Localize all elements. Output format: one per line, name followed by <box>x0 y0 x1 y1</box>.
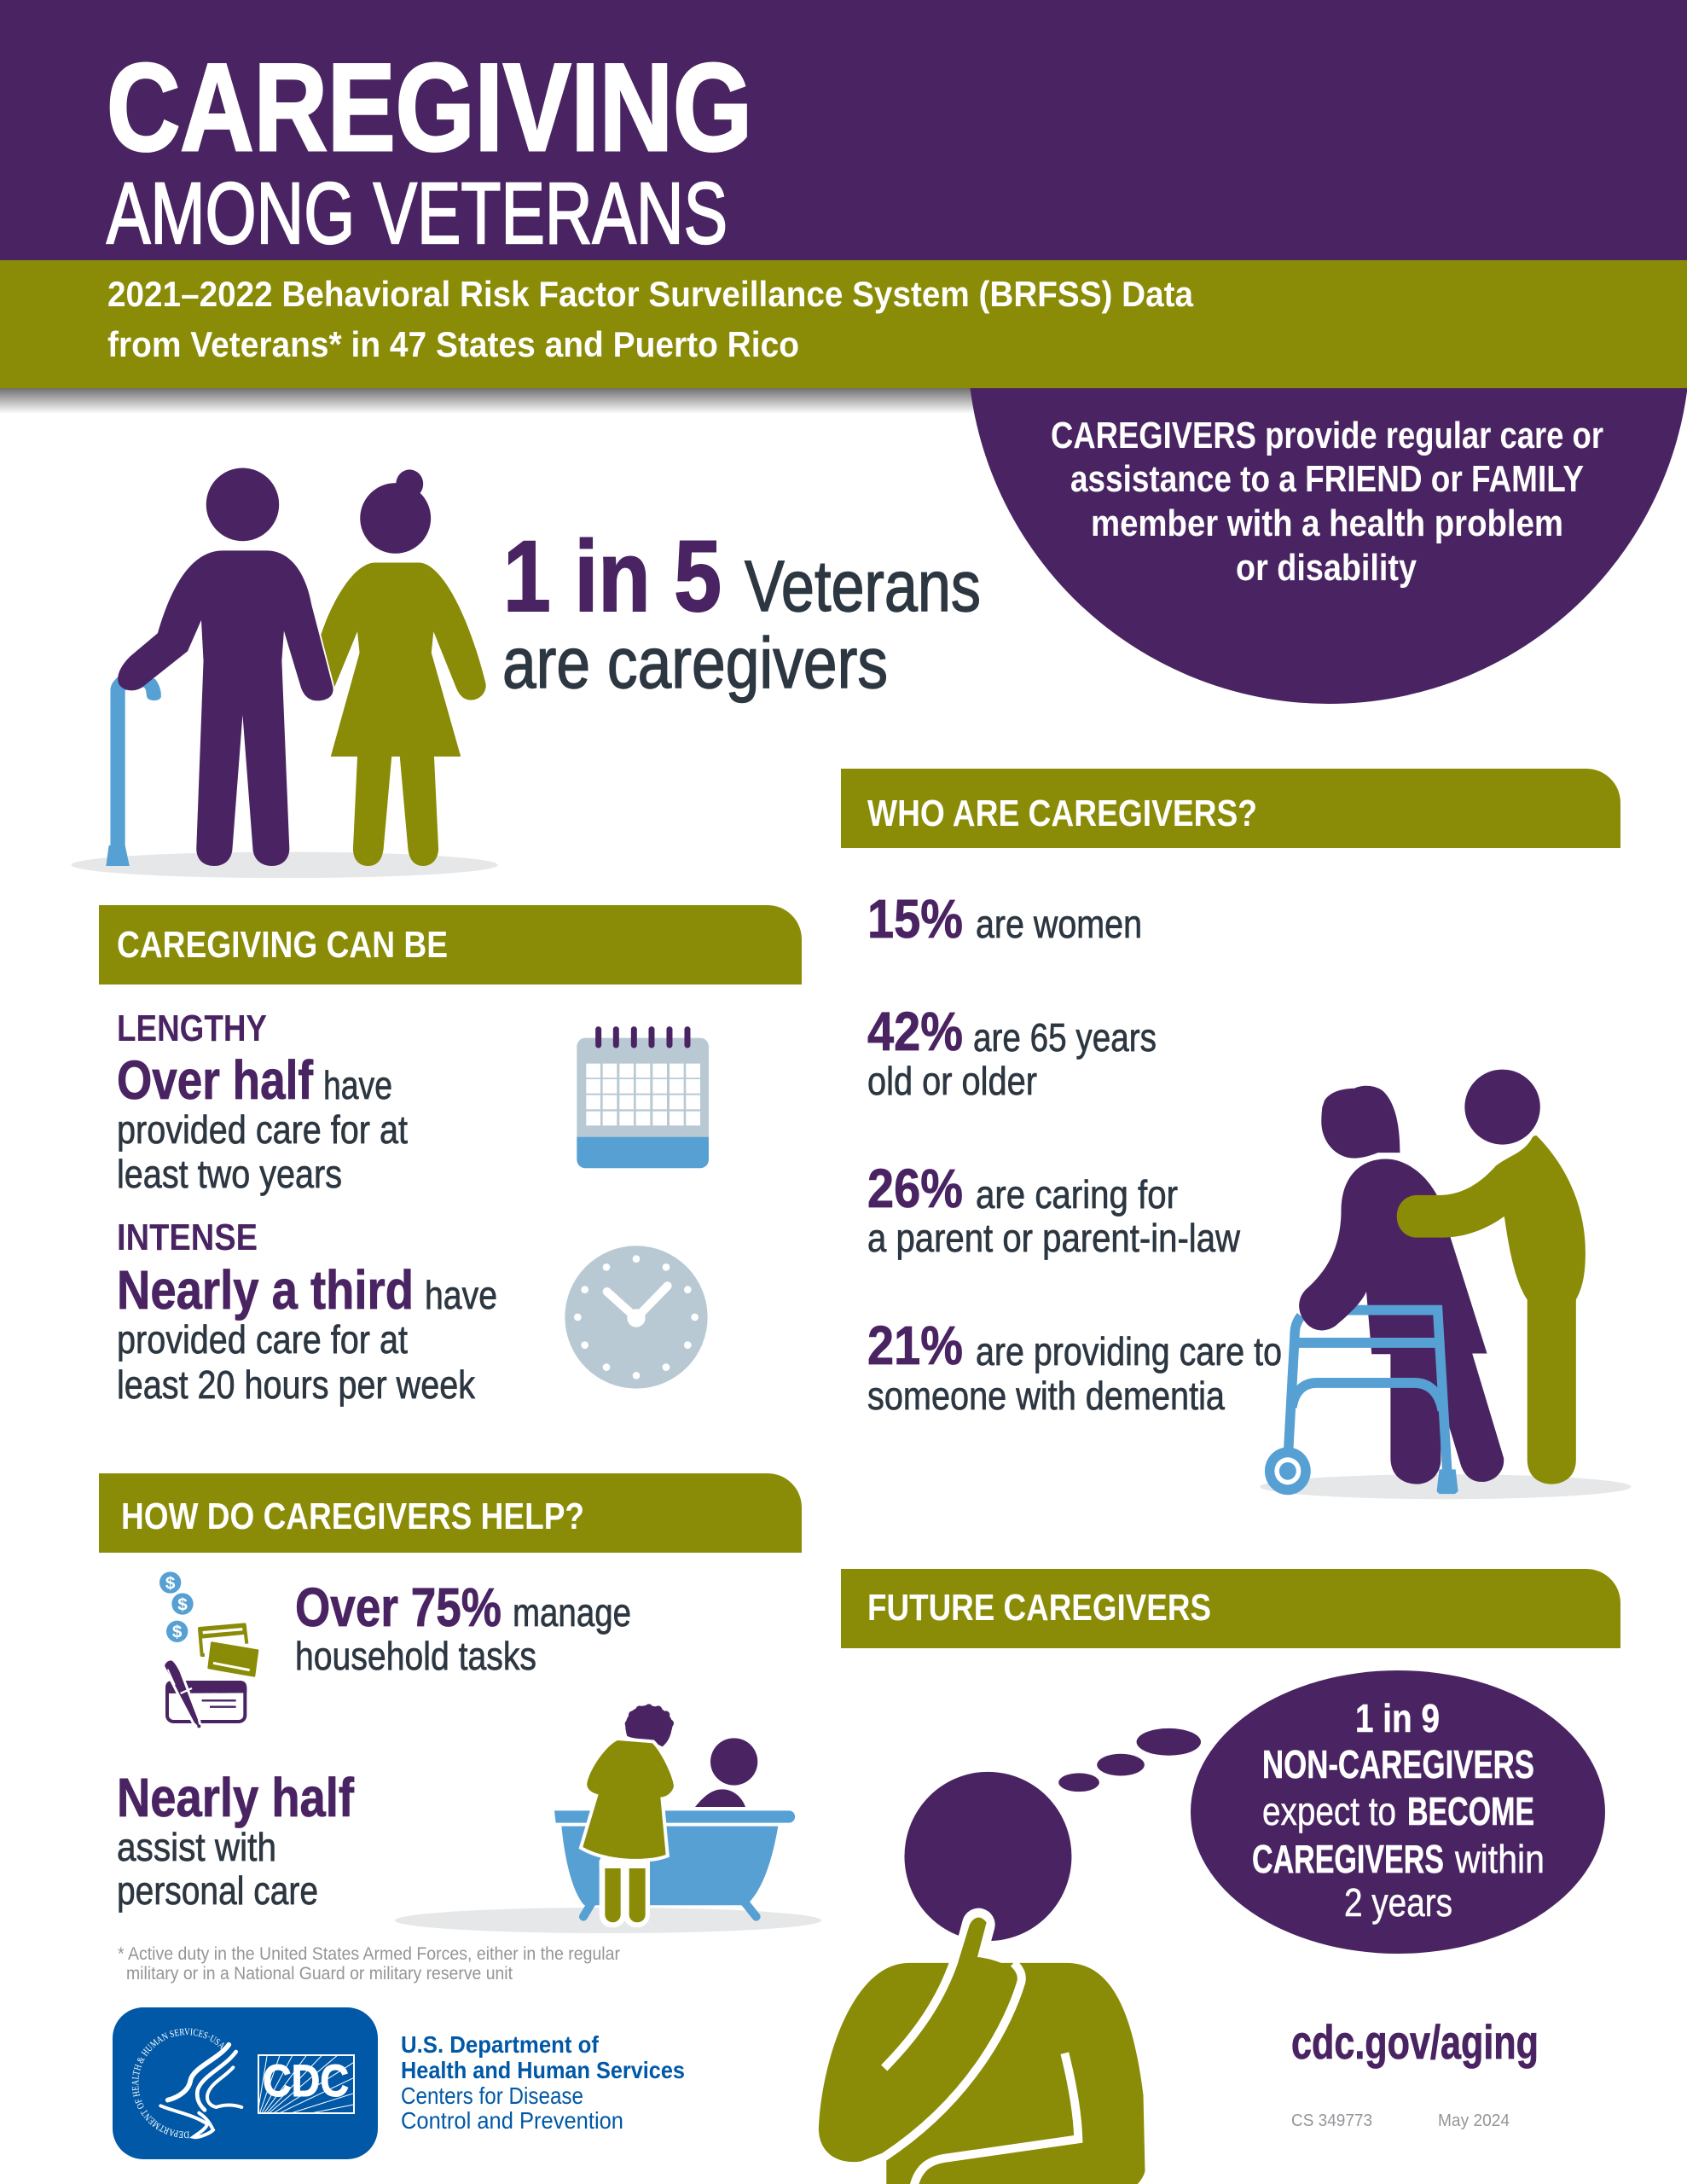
stat: 15 percent women: 15% <box>867 888 963 950</box>
stat: 42 percent 65 or older <box>867 1001 1157 1103</box>
headline stat: 1 in 5 <box>502 520 981 703</box>
text block: lengthy: Over half <box>117 1049 314 1111</box>
agency name: Centers for Disease <box>401 2082 583 2109</box>
callout: thought bubble: 2 years <box>1344 1880 1452 1925</box>
text block: household tasks: manage <box>513 1590 631 1635</box>
stat: 42 percent 65 or older: 42% <box>867 1001 963 1062</box>
text block: personal care: Nearly half <box>117 1767 355 1828</box>
panel: who are caregivers heading: WHO ARE CAREGIVERS? <box>867 793 1257 834</box>
stat: 26 percent caring for parent: 26% <box>867 1158 963 1219</box>
callout: caregiver definition: assistance to a FRIEND or FAMILY <box>1070 458 1584 500</box>
text block: personal care <box>117 1767 355 1913</box>
title: AMONG VETERANS <box>107 165 728 262</box>
text block: lengthy: have <box>323 1063 392 1107</box>
headline stat: 1 in 5: are caregivers <box>502 623 888 703</box>
callout: thought bubble <box>1191 1670 1605 1954</box>
panel: future caregivers heading <box>841 1569 1620 1648</box>
agency name: Control and Prevention <box>401 2107 623 2134</box>
stat: 21 percent dementia: are providing care to <box>976 1329 1282 1374</box>
text block: intense <box>117 1217 497 1407</box>
panel: caregiving can be heading <box>99 905 802 985</box>
icon: caregiver helping person with walker <box>1260 1070 1631 1499</box>
text block: personal care: assist with <box>117 1825 276 1869</box>
text block: intense: have <box>425 1273 497 1317</box>
text block: household tasks: household tasks <box>295 1634 536 1678</box>
website link: cdc.gov/aging <box>1291 2015 1539 2069</box>
callout: thought bubble: expect to <box>1262 1789 1396 1833</box>
callout: caregiver definition <box>971 388 1687 704</box>
icon: calendar <box>577 1030 709 1168</box>
callout: thought bubble: within <box>1454 1837 1545 1881</box>
publication code and date <box>1291 2111 1510 2130</box>
callout: caregiver definition: or disability <box>1236 547 1417 589</box>
callout: thought bubble: CAREGIVERS <box>1252 1837 1444 1881</box>
footnote: military or in a National Guard or military reserve unit <box>126 1964 513 1984</box>
text block: intense: Nearly a third <box>117 1259 414 1321</box>
publication code and date: May 2024 <box>1438 2111 1510 2130</box>
stat: 42 percent 65 or older: are 65 years <box>973 1015 1157 1060</box>
logo: HHS and CDC <box>113 2007 378 2159</box>
panel: caregiving can be heading: CAREGIVING CAN BE <box>117 924 448 966</box>
title <box>107 38 752 262</box>
icon: household finances: $ <box>177 1594 188 1614</box>
icon: clock <box>565 1246 708 1389</box>
text block: intense: provided care for at <box>117 1317 408 1362</box>
footnote: * Active duty in the United States Armed Forces, either in the regular <box>118 1944 620 1964</box>
icon: household finances <box>159 1571 258 1728</box>
stat: 15 percent women: are women <box>976 902 1142 946</box>
stat: 21 percent dementia: 21% <box>867 1315 963 1376</box>
stat: 26 percent caring for parent <box>867 1158 1241 1260</box>
stat: 26 percent caring for parent: are caring for <box>976 1172 1178 1217</box>
agency name: Health and Human Services <box>401 2057 685 2083</box>
text block: lengthy: provided care for at <box>117 1107 408 1152</box>
callout: caregiver definition: member with a health problem <box>1091 502 1563 544</box>
stat: 15 percent women <box>867 888 1142 950</box>
text block: intense: INTENSE <box>117 1217 258 1258</box>
callout: thought bubble: 1 in 9 <box>1355 1696 1440 1740</box>
text block: household tasks <box>295 1577 631 1678</box>
stat: 21 percent dementia: someone with dementia <box>867 1374 1225 1418</box>
icon: household finances: $ <box>172 1623 183 1642</box>
footnote <box>118 1944 620 1984</box>
panel: how do caregivers help heading <box>99 1473 802 1553</box>
subtitle: 2021–2022 Behavioral Risk Factor Surveillance System (BRFSS) Data <box>107 274 1194 314</box>
stat: 21 percent dementia <box>867 1315 1282 1418</box>
agency name: U.S. Department of <box>401 2031 600 2058</box>
publication code and date: CS 349773 <box>1291 2111 1372 2130</box>
logo: HHS and CDC: DEPARTMENT OF HEALTH & HUMAN SERVICES·USA <box>131 2029 224 2138</box>
text block: lengthy: LENGTHY <box>117 1008 267 1049</box>
stat: 26 percent caring for parent: a parent or parent-in-law <box>867 1216 1241 1260</box>
agency name <box>401 2031 685 2134</box>
icon: caregiver bathing person <box>395 1704 821 1933</box>
title: CAREGIVING <box>107 38 752 177</box>
headline stat: 1 in 5: 1 in 5 <box>503 520 722 633</box>
panel: who are caregivers heading <box>841 769 1620 848</box>
subtitle: from Veterans* in 47 States and Puerto Rico <box>107 324 799 364</box>
icon: older couple with cane <box>72 468 498 878</box>
text block: intense: least 20 hours per week <box>117 1362 476 1407</box>
subtitle <box>107 274 1194 364</box>
callout: thought bubble: BECOME <box>1407 1789 1534 1833</box>
callout: thought bubble: NON-CAREGIVERS <box>1262 1742 1534 1786</box>
icon: person thinking <box>819 1728 1201 2184</box>
stat: 42 percent 65 or older: old or older <box>867 1059 1037 1103</box>
text block: lengthy: least two years <box>117 1152 342 1196</box>
panel: future caregivers heading: FUTURE CAREGIVERS <box>867 1587 1211 1629</box>
text block: lengthy <box>117 1008 408 1196</box>
panel: how do caregivers help heading: HOW DO CAREGIVERS HELP? <box>121 1496 584 1537</box>
text block: household tasks: Over 75% <box>295 1577 501 1638</box>
icon: household finances: $ <box>165 1573 176 1593</box>
headline stat: 1 in 5: Veterans <box>745 546 981 626</box>
logo: HHS and CDC: CDC <box>263 2056 349 2106</box>
header band <box>0 0 1687 414</box>
text block: personal care: personal care <box>117 1868 318 1913</box>
